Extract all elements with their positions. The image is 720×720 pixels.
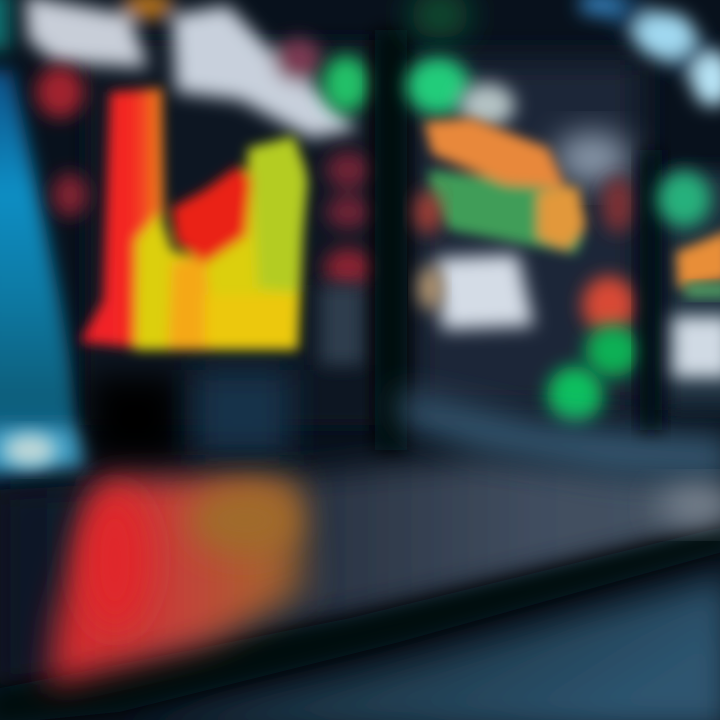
white data block bbox=[672, 316, 720, 378]
grey column beside monitor one bbox=[320, 285, 364, 365]
panel: monitor one bbox=[25, 0, 375, 460]
orange tint within the reflection bbox=[190, 485, 300, 555]
green indicator dot bbox=[585, 325, 641, 377]
red indicators on monitor one sides bbox=[36, 66, 372, 288]
desk reflection of the chart bbox=[48, 478, 310, 686]
red chart markers bbox=[414, 190, 442, 234]
monitor three body bbox=[668, 170, 720, 410]
gap between monitors bbox=[375, 30, 407, 450]
monitor two base bbox=[395, 392, 720, 480]
green status light, monitor one bbox=[322, 55, 370, 113]
stacked chart bands bbox=[424, 118, 586, 254]
gap before monitor three bbox=[640, 150, 662, 430]
monitor one body bbox=[85, 40, 375, 425]
panel: monitor three bbox=[640, 150, 720, 430]
green light, monitor three bbox=[657, 171, 711, 227]
highlight at right of desk bbox=[658, 485, 720, 525]
green indicator dot, lower bbox=[547, 366, 603, 424]
dark green glow, top centre bbox=[410, 0, 470, 39]
panel: left blue screen bbox=[0, 0, 88, 478]
desk surface bbox=[0, 458, 720, 690]
white blocks at top of monitor one bbox=[25, 0, 358, 138]
green chart band bbox=[685, 283, 720, 298]
green status light, monitor two bbox=[406, 57, 470, 115]
bar chart: red, orange and yellow bbox=[80, 88, 308, 350]
desk front edge bbox=[0, 525, 720, 720]
floor area below the desk edge bbox=[120, 575, 720, 720]
monitor two body bbox=[415, 60, 640, 410]
left screen highlight bbox=[4, 434, 56, 466]
red core of the reflection bbox=[80, 490, 150, 630]
monitor one stand bbox=[195, 370, 290, 455]
panel: monitor two bbox=[375, 30, 720, 480]
monitor one stand shadow bbox=[90, 375, 180, 460]
red indicator dot bbox=[582, 276, 636, 334]
orange chart band bbox=[676, 230, 720, 288]
pale highlight next to the green light bbox=[459, 83, 515, 127]
blue lights, top right bbox=[575, 0, 720, 106]
white data block bbox=[436, 254, 534, 330]
pale block, top right of monitor two bbox=[554, 132, 630, 184]
white data block edge bbox=[418, 266, 442, 310]
